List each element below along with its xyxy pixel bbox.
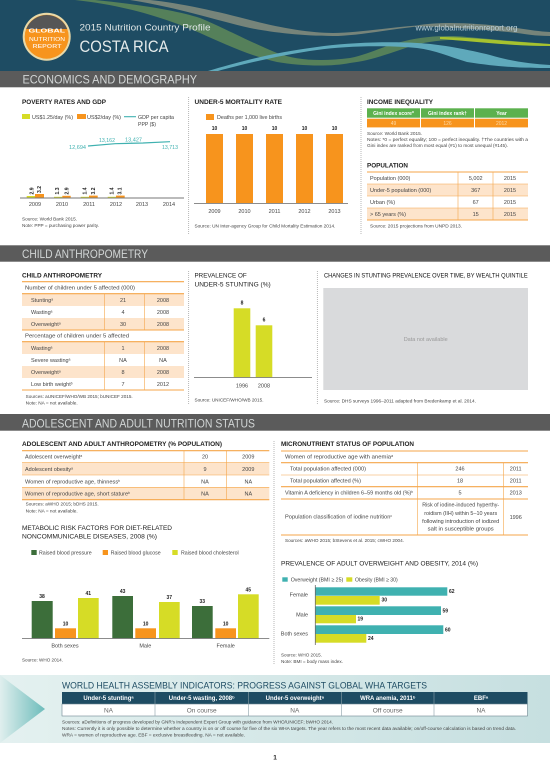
table: NA	[201, 492, 209, 498]
bar chart: 2008	[258, 383, 270, 389]
table: 2011	[510, 479, 522, 485]
grouped bar chart: 10	[223, 621, 229, 627]
table: 2015	[504, 212, 516, 218]
table: 9	[203, 467, 207, 473]
panel: prevalence of under-5 stunting	[194, 273, 312, 403]
indicators table: Under-5 overweight	[266, 696, 322, 702]
bar chart: 6	[263, 318, 266, 324]
poverty bar chart: 2013	[136, 202, 148, 208]
table: Women of reproductive age with anemia	[285, 454, 383, 460]
section band: adolescent and adult nutrition status	[0, 414, 550, 431]
table: 2015	[504, 200, 516, 206]
indicators table: a	[486, 695, 489, 700]
poverty bar chart: 2.9	[64, 187, 70, 194]
poverty bar chart: 1.3	[55, 187, 61, 194]
wave: teal ribbon	[208, 42, 550, 71]
table: 2013	[510, 491, 522, 497]
source note: Note: PPP = purchasing power parity.	[22, 223, 99, 228]
table: 2008	[157, 298, 169, 304]
table: Vitamin A deficiency in children 6–59 months old (%)	[285, 491, 413, 497]
table: 1996	[510, 515, 522, 521]
GDP line chart: 13,713	[162, 145, 178, 151]
indicators table: Under-5 wasting, 2008	[169, 696, 232, 702]
panel: poverty rates and GDP	[20, 99, 184, 228]
notes: Source: World Bank 2015.	[367, 131, 422, 136]
legend: Raised blood glucose	[111, 551, 161, 557]
bar chart	[194, 300, 312, 389]
bar chart: 10	[212, 126, 217, 132]
table: 20	[202, 455, 208, 461]
logo	[23, 13, 71, 61]
table: a	[59, 369, 61, 373]
panel: world health assembly indicators	[0, 675, 550, 743]
indicators table: b	[413, 695, 416, 700]
table: salt in susceptible groups	[428, 527, 494, 533]
indicators table: EBF	[474, 696, 486, 702]
GDP line chart: 13,162	[99, 138, 115, 144]
table: 5	[458, 491, 462, 497]
table: Women of reproductive age, thinness	[25, 479, 116, 485]
country name: COSTA RICA	[80, 37, 169, 56]
table: Overweight	[31, 322, 59, 328]
source note	[281, 652, 343, 664]
table: 2015	[504, 176, 516, 182]
source note: Sources: aUNICEF/WHO/WB 2015; bUNICEF 2015.	[26, 394, 133, 399]
table: Gini index rank†	[428, 111, 467, 117]
table: Wasting	[31, 346, 51, 352]
report subtitle: 2015 Nutrition Country Profile	[80, 23, 210, 34]
table: NA	[119, 358, 127, 364]
grouped bar chart: 41	[86, 591, 91, 597]
table: 2011	[510, 467, 522, 473]
table: following introduction of iodized	[422, 519, 499, 525]
table: Population classification of iodine nutrition	[285, 514, 387, 520]
heading: NONCOMMUNICABLE DISEASES, 2008 (%)	[22, 534, 157, 541]
heading: METABOLIC RISK FACTORS FOR DIET-RELATED	[22, 525, 172, 532]
source note: Source: World Bank 2015.	[22, 216, 77, 222]
table: NA	[201, 479, 209, 485]
data not available box	[323, 288, 528, 390]
table: b	[411, 490, 413, 494]
grouped bar chart	[22, 587, 269, 650]
legend: GDP per capita	[138, 115, 175, 121]
indicators table: NA	[476, 707, 486, 714]
table: 2009	[242, 467, 254, 473]
heading	[22, 525, 172, 541]
table: b	[71, 381, 73, 385]
indicators table: NA	[104, 707, 114, 714]
source note: Source: UN Inter-agency Group for Child Mortality Estimation 2014.	[194, 224, 336, 228]
table: Urban (%)	[370, 200, 395, 206]
legend: PPP ($)	[138, 122, 156, 128]
bar chart	[194, 126, 348, 215]
bar chart: 1996	[236, 383, 248, 389]
notes	[62, 719, 516, 738]
poverty bar chart: 2010	[56, 202, 68, 208]
logo: NUTRITION	[29, 37, 65, 43]
poverty bar chart: 1.4	[82, 187, 88, 194]
table: > 65 years (%)	[370, 212, 406, 218]
table: Number of children under 5 affected (000)	[25, 286, 135, 292]
panel: metabolic risk factors	[22, 525, 269, 663]
legend	[282, 577, 398, 584]
table: 2009	[242, 455, 254, 461]
table: a	[51, 345, 53, 349]
table: 2015	[504, 188, 516, 194]
bar chart: 2010	[238, 209, 251, 215]
legend: Obesity (BMI ≥ 30)	[355, 578, 398, 584]
GDP line chart	[69, 138, 178, 151]
table: 2012	[496, 121, 507, 127]
logo: REPORT	[32, 44, 62, 50]
grouped bar chart: 37	[167, 595, 172, 601]
section band: child anthropometry: CHILD ANTHROPOMETRY	[22, 247, 148, 261]
table: a	[59, 321, 61, 325]
source note: Source: WHO 2014.	[22, 658, 63, 663]
indicators table: WRA anemia, 2011	[360, 696, 413, 702]
table: Women of reproductive age, short stature	[25, 492, 126, 498]
table: 15	[473, 212, 479, 218]
table: roidism (IIH) within 5–10 years	[424, 511, 497, 517]
data not available box: Data not available	[404, 337, 448, 343]
heading: POPULATION	[367, 162, 408, 170]
legend	[22, 114, 175, 128]
table: 2008	[157, 310, 169, 316]
table: 2008	[157, 322, 169, 328]
bar chart: 2012	[298, 209, 311, 215]
poverty bar chart: 3.1	[118, 187, 124, 194]
poverty bar chart: 2014	[163, 202, 175, 208]
table: Stunting	[31, 298, 51, 304]
table: Adolescent obesity	[25, 467, 71, 473]
table: Adolescent overweight	[25, 455, 80, 461]
heading: UNDER-5 MORTALITY RATE	[194, 99, 282, 106]
legend: Raised blood cholesterol	[181, 551, 239, 557]
heading: WORLD HEALTH ASSEMBLY INDICATORS: PROGRESS AGAINST GLOBAL WHA TARGETS	[62, 680, 427, 690]
table: Risk of iodine-induced hyperthy-	[422, 503, 499, 509]
table: 4	[121, 310, 125, 316]
grouped bar chart: Both sexes	[51, 644, 79, 650]
notes: Notes: *0 = perfect equality; 100 = perfect inequality. †The countries with a	[367, 137, 529, 142]
table: 67	[473, 200, 479, 206]
table: a	[71, 466, 73, 470]
heading	[194, 273, 271, 289]
logo: GLOBAL	[28, 28, 66, 34]
source note	[26, 502, 99, 514]
heading: PREVALENCE OF ADULT OVERWEIGHT AND OBESITY, 2014 (%)	[281, 561, 478, 568]
table: Severe wasting	[31, 358, 69, 364]
indicators table: a	[322, 695, 325, 700]
grouped bar chart: 33	[200, 599, 205, 605]
panel: population	[367, 162, 528, 228]
section band: adolescent and adult nutrition status: ADOLESCENT AND ADULT NUTRITION STATUS	[22, 416, 255, 430]
heading: CHILD ANTHROPOMETRY	[22, 273, 102, 280]
grouped bar chart: Male	[139, 644, 151, 650]
table: a	[51, 309, 53, 313]
table: 21	[120, 298, 126, 304]
panel: child anthropometry table	[22, 273, 184, 405]
table: a	[69, 357, 71, 361]
source note: Note: BMI = body mass index.	[281, 659, 343, 664]
source note	[22, 216, 99, 228]
grouped bar chart: 43	[120, 589, 126, 595]
bar chart: 10	[272, 126, 277, 132]
GDP line chart: 13,427	[125, 138, 142, 144]
grouped bar chart: 10	[63, 621, 68, 627]
notes: Notes: Currently it is only possible to determine whether a country is on or off course for five of the six WHA targets. The year refers to the most recent data available; on/off-course calculation is based on trend data.	[62, 726, 516, 731]
table: 2008	[157, 370, 169, 376]
table: Wasting	[31, 310, 51, 316]
indicators table: NA	[290, 707, 300, 714]
panel: micronutrient status of population	[281, 441, 528, 543]
section band: child anthropometry	[0, 245, 550, 262]
indicators table: a	[131, 695, 134, 700]
table: Percentage of children under 5 affected	[25, 334, 129, 340]
table: a	[51, 297, 53, 301]
table: c	[390, 514, 392, 518]
indicators table: b	[232, 695, 235, 700]
source note: Source: WHO 2015.	[281, 652, 322, 657]
table	[281, 451, 528, 535]
section band: economics and demography: ECONOMICS AND DEMOGRAPHY	[22, 72, 197, 86]
bar chart: 10	[242, 126, 247, 132]
table: a	[80, 454, 82, 458]
GDP line chart: 12,694	[69, 145, 86, 151]
table: 7	[121, 382, 125, 388]
legend: US$2/day (%)	[87, 115, 121, 121]
header banner	[0, 0, 550, 71]
table: 5,002	[469, 176, 483, 182]
source note: Sources: aWHO 2015; bDHS 2015.	[26, 502, 99, 507]
table: Low birth weight	[31, 382, 71, 388]
table: 8	[121, 370, 125, 376]
indicators table: On course	[187, 707, 217, 714]
source note: Source: UNICEF/WHO/WB 2015.	[194, 398, 264, 403]
panel: under-5 mortality rate	[194, 99, 348, 228]
table: Gini index score*	[373, 111, 414, 117]
bar chart: 2009	[208, 209, 221, 215]
panel: prevalence of adult overweight and obesity	[281, 561, 478, 664]
table: 126	[443, 121, 452, 127]
poverty bar chart: 2012	[110, 202, 122, 208]
grouped bar chart: 10	[143, 621, 149, 627]
table: b	[118, 479, 120, 483]
poverty bar chart: 2009	[29, 202, 41, 208]
horizontal bar chart	[281, 585, 455, 645]
table: Overweight	[31, 370, 59, 376]
table: 2012	[157, 382, 169, 388]
table: Total population affected (000)	[290, 467, 366, 473]
poverty bar chart: 3.2	[37, 186, 43, 193]
table	[367, 108, 528, 127]
heading: ADOLESCENT AND ADULT ANTHROPOMETRY (% POPULATION)	[22, 441, 222, 448]
notes	[367, 131, 529, 148]
indicators table	[62, 692, 528, 716]
horizontal bar chart: 30	[382, 598, 387, 604]
horizontal bar chart: Male	[296, 612, 308, 618]
heading: MICRONUTRIENT STATUS OF POPULATION	[281, 441, 414, 448]
poverty bar chart	[20, 186, 184, 208]
table: Year	[496, 111, 507, 117]
source note	[26, 394, 133, 405]
horizontal bar chart: 60	[445, 627, 451, 633]
bar chart: 10	[302, 126, 307, 132]
heading: PREVALENCE OF	[194, 273, 247, 280]
notes: WRA = women of reproductive age. EBF = exclusive breastfeeding. NA = not available.	[62, 733, 245, 738]
legend: Deaths per 1,000 live births	[217, 115, 282, 121]
horizontal bar chart: Female	[290, 593, 308, 599]
heading: INCOME INEQUALITY	[367, 99, 433, 106]
icon: arrow	[0, 675, 45, 743]
table: Total population affected (%)	[290, 479, 361, 485]
poverty bar chart: 3.2	[91, 187, 97, 194]
indicators table: Under-5 stunting	[83, 696, 131, 702]
wave: olive and lime ribbon	[75, 0, 550, 66]
table: Population (000)	[370, 176, 411, 182]
section band: economics and demography	[0, 71, 550, 87]
bar chart: 10	[332, 126, 337, 132]
table: 246	[455, 467, 465, 473]
table: 18	[457, 479, 463, 485]
source note: Source: DHS surveys 1996–2011 adapted from Bredenkamp et al. 2014.	[324, 398, 476, 403]
panel: adolescent and adult anthropometry	[22, 441, 269, 514]
table: 367	[471, 188, 480, 194]
poverty bar chart: 2011	[83, 202, 95, 208]
table: NA	[159, 358, 167, 364]
notes: Sources: aDefinitions of progress developed by GNR's Independent Expert Group with guidance from WHO/UNICEF; bWHO 2014.	[62, 719, 333, 724]
table: Under-5 population (000)	[370, 188, 431, 194]
bar chart: 2013	[328, 209, 341, 215]
panel: income inequality	[367, 99, 529, 148]
legend: Overweight (BMI ≥ 25)	[291, 578, 343, 584]
wave: grey ribbon	[130, 0, 550, 36]
poverty bar chart: 2.9	[29, 187, 35, 194]
heading: UNDER-5 STUNTING (%)	[194, 282, 271, 289]
table	[367, 172, 528, 220]
grouped bar chart: 38	[39, 594, 45, 600]
source note: Sources: aWHO 2015; bStevens et al. 2015; cWHO 2004.	[285, 538, 404, 543]
horizontal bar chart: 24	[368, 636, 374, 642]
grouped bar chart: 45	[246, 587, 251, 593]
table: b	[128, 491, 130, 495]
legend: US$1.25/day (%)	[32, 115, 73, 121]
table	[22, 451, 269, 500]
table: 1	[121, 346, 125, 352]
source note: Note: NA = not available.	[26, 400, 78, 405]
table	[22, 282, 184, 390]
table: a	[391, 454, 393, 458]
table: NA	[244, 479, 252, 485]
horizontal bar chart: Both sexes	[281, 631, 308, 637]
bar chart: 8	[241, 300, 244, 306]
bar chart: 2011	[269, 209, 280, 215]
table: 2008	[157, 346, 169, 352]
notes: Gini index are ranked from most equal (#1) to most unequal (#145).	[367, 143, 508, 148]
panel: changes in stunting prevalence by wealth quintile	[323, 273, 528, 403]
page number: 1	[273, 754, 277, 761]
table: 49	[391, 121, 396, 127]
legend	[31, 550, 239, 557]
table: 30	[120, 322, 126, 328]
indicators table: Off course	[373, 707, 403, 714]
poverty bar chart: 1.4	[109, 187, 115, 194]
horizontal bar chart: 59	[442, 609, 448, 615]
grouped bar chart: Female	[217, 644, 235, 650]
source note: Note: NA = not available.	[26, 509, 78, 514]
horizontal bar chart: 19	[358, 617, 363, 623]
horizontal bar chart: 62	[449, 589, 455, 595]
table: NA	[244, 492, 252, 498]
legend: Raised blood pressure	[39, 551, 92, 557]
heading: POVERTY RATES AND GDP	[22, 99, 106, 106]
website url: www.globalnutritionreport.org	[415, 24, 518, 33]
source note: Source: 2015 projections from UNPD 2013.	[370, 224, 462, 228]
